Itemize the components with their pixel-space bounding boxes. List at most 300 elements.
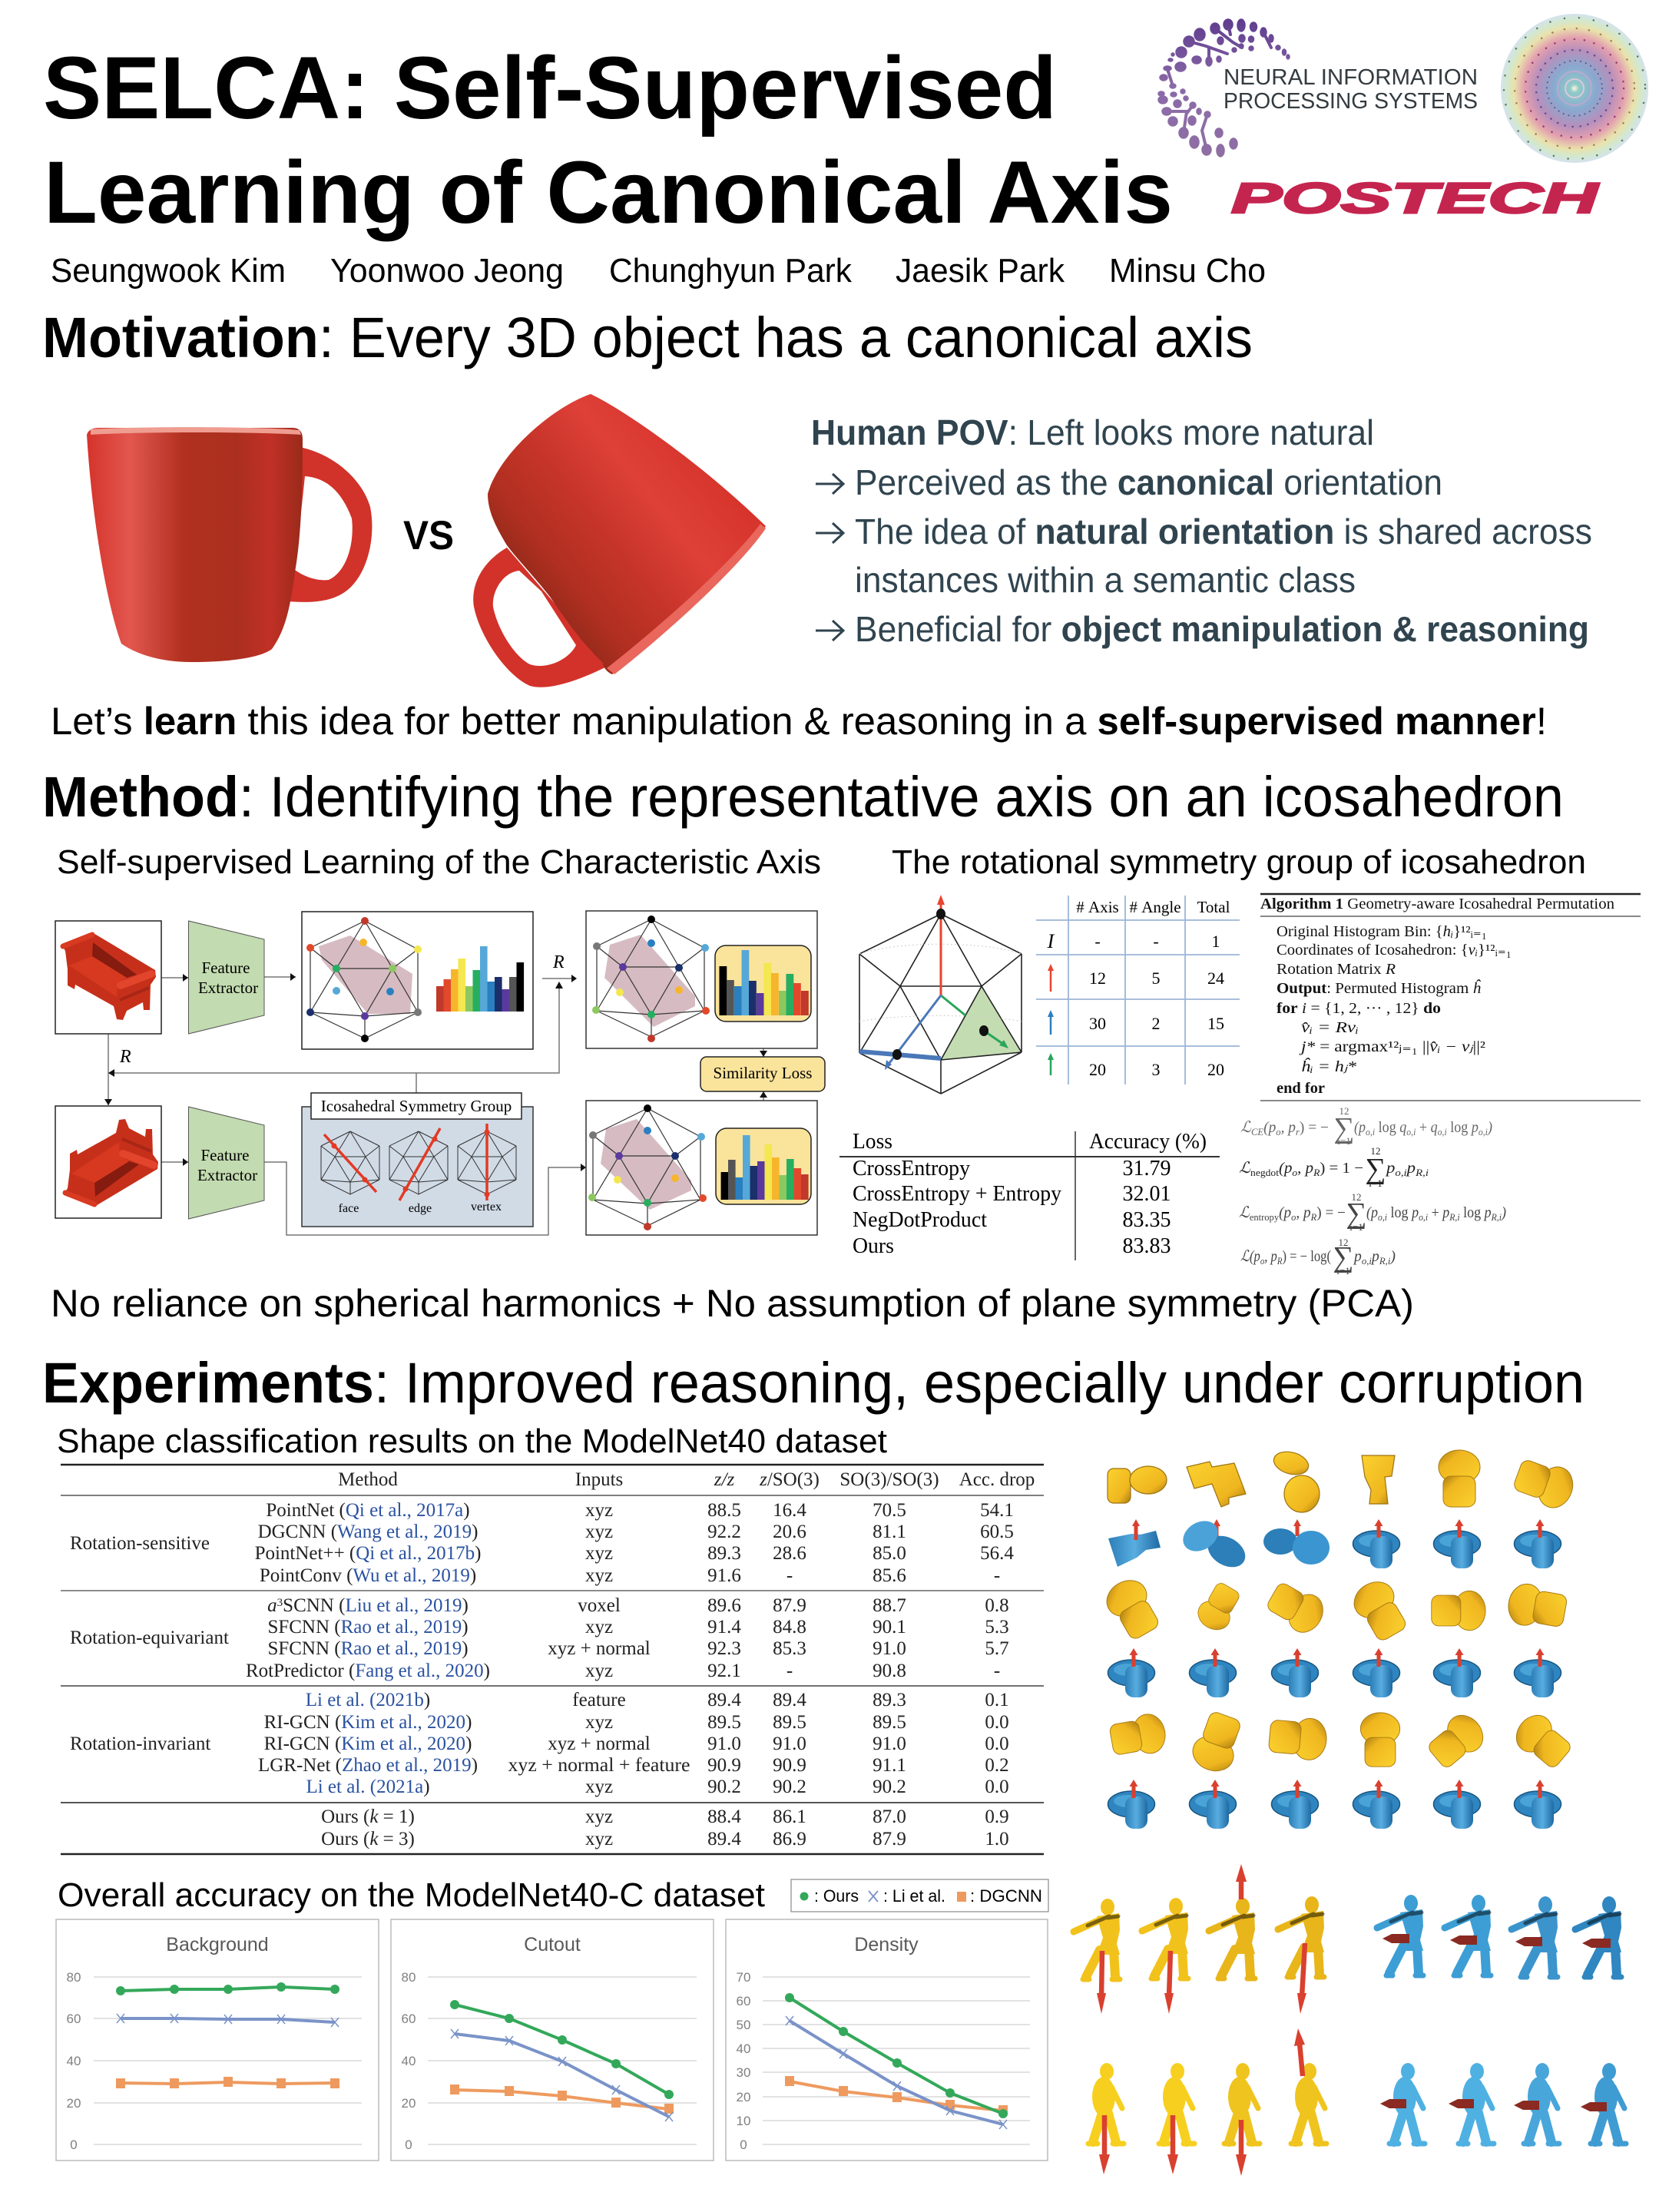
table: ModelNet40 results: 90.2 bbox=[707, 1777, 741, 1797]
loss formulas: ∑ bbox=[1333, 1241, 1354, 1273]
table: loss accuracy: NegDotProduct bbox=[853, 1208, 987, 1232]
table: ModelNet40 results: 89.3 bbox=[873, 1690, 906, 1710]
table: ModelNet40 results: 86.1 bbox=[773, 1806, 806, 1827]
image: upright red mug bbox=[87, 427, 372, 662]
loss formulas: p bbox=[1442, 1204, 1450, 1221]
table: rotation counts: 2 bbox=[1152, 1014, 1160, 1033]
loss formulas: o bbox=[1276, 1126, 1281, 1137]
table: ModelNet40 results: 91.0 bbox=[773, 1734, 806, 1754]
algorithm box: end for bbox=[1277, 1080, 1325, 1097]
table: ModelNet40 results: - bbox=[994, 1661, 1000, 1681]
loss formulas: i=1 bbox=[1349, 1221, 1363, 1233]
text block: Human POV: Perceived as the canonical orientation bbox=[855, 462, 1442, 502]
loss formulas: p bbox=[1386, 1160, 1394, 1177]
table: ModelNet40 results: 1.0 bbox=[985, 1829, 1009, 1849]
table: ModelNet40 results: 5.3 bbox=[985, 1617, 1009, 1637]
table: ModelNet40 results: 0.9 bbox=[985, 1806, 1009, 1827]
table: ModelNet40 results: Rotation-equivariant bbox=[70, 1628, 229, 1648]
table: rotation counts: 20 bbox=[1207, 1060, 1224, 1079]
table: ModelNet40 results: 28.6 bbox=[773, 1543, 806, 1564]
table: ModelNet40 results: 0.0 bbox=[985, 1712, 1009, 1733]
loss formulas: + bbox=[1416, 1119, 1431, 1136]
loss formulas: i=1 bbox=[1336, 1265, 1350, 1277]
loss formulas: R bbox=[1313, 1167, 1320, 1178]
table: rotation counts: # Angle bbox=[1129, 898, 1181, 916]
diagram: large icosahedron with rotation axes bbox=[859, 895, 1022, 1094]
similarity loss box bbox=[700, 1057, 825, 1091]
table: loss accuracy: 83.35 bbox=[1123, 1208, 1171, 1232]
heading: Experiments: Experiments: Improved reasoning, especially under corruption bbox=[42, 1351, 1584, 1415]
line chart: Density: 20 bbox=[737, 2090, 750, 2104]
loss formulas: log bbox=[1447, 1119, 1472, 1136]
chart legend bbox=[791, 1879, 1048, 1912]
table: ModelNet40 results: 91.0 bbox=[873, 1638, 906, 1659]
authors: Minsu Cho bbox=[1109, 252, 1266, 290]
table: rotation counts: I bbox=[1047, 930, 1055, 952]
algorithm box: Algorithm 1 Geometry-aware Icosahedral Permutation bbox=[1260, 896, 1614, 912]
loss formulas: ) = − bbox=[1300, 1119, 1329, 1136]
text: self-supervised statement: Let’s learn this idea for better manipulation & reasoning in a self-supervised manner! bbox=[51, 700, 1547, 743]
loss formulas: negdot bbox=[1250, 1167, 1279, 1178]
table: ModelNet40 results: Rotation-sensitive bbox=[70, 1533, 210, 1554]
table: ModelNet40 results: 0.0 bbox=[985, 1734, 1009, 1754]
table: ModelNet40 results: xyz bbox=[585, 1661, 613, 1681]
table: ModelNet40 results: 90.9 bbox=[707, 1755, 741, 1776]
table: loss accuracy: CrossEntropy bbox=[853, 1157, 970, 1181]
permuted icosahedron box top bbox=[586, 911, 817, 1048]
title: Learning of Canonical Axis bbox=[44, 144, 1173, 242]
table: ModelNet40 results: 89.5 bbox=[773, 1712, 806, 1733]
loss formulas: o bbox=[1292, 1167, 1298, 1178]
table: loss accuracy: 31.79 bbox=[1123, 1157, 1171, 1181]
table: ModelNet40 results: 0.0 bbox=[985, 1777, 1009, 1797]
loss formulas: (p bbox=[1366, 1204, 1379, 1221]
loss formulas: (p bbox=[1279, 1160, 1292, 1177]
algorithm box: j* = argmax¹²ⱼ₌₁ || v̂ᵢ − vⱼ ||² bbox=[1298, 1038, 1485, 1055]
authors: Yoonwoo Jeong bbox=[330, 252, 564, 290]
table: ModelNet40 results: Acc. drop bbox=[959, 1469, 1035, 1490]
icosahedron with histogram bbox=[302, 912, 533, 1049]
loss formulas: ) = − bbox=[1316, 1204, 1346, 1221]
diagram: pipeline bbox=[55, 911, 825, 1235]
table: ModelNet40 results: Method bbox=[338, 1469, 398, 1490]
table: ModelNet40 results: a bbox=[267, 1595, 277, 1616]
table: ModelNet40 results: xyz bbox=[585, 1806, 613, 1827]
table: ModelNet40 results: 60.5 bbox=[980, 1522, 1014, 1542]
line chart: Density: 0 bbox=[740, 2137, 747, 2152]
table: ModelNet40 results: 90.2 bbox=[773, 1777, 806, 1797]
table: ModelNet40 results: 70.5 bbox=[873, 1500, 906, 1521]
permuted icosahedron box bottom bbox=[586, 1101, 817, 1235]
panel: icosahedral symmetry group bbox=[302, 1093, 533, 1227]
feature extractor top bbox=[189, 921, 264, 1034]
table: ModelNet40 results: 89.5 bbox=[707, 1712, 741, 1733]
loss formulas: ) bbox=[1501, 1204, 1506, 1221]
text block: Human POV: Beneficial for object manipulation & reasoning bbox=[855, 609, 1589, 649]
line chart: Cutout: 40 bbox=[402, 2054, 416, 2068]
table: ModelNet40 results: PointConv (Wu et al., 2019) bbox=[260, 1565, 476, 1586]
text: no reliance statement: No reliance on spherical harmonics + No assumption of plane symmetry (PCA) bbox=[51, 1282, 1414, 1325]
chart legend: : Ours bbox=[814, 1886, 859, 1906]
loss formulas: log bbox=[1375, 1119, 1399, 1136]
loss formulas: , p bbox=[1296, 1204, 1311, 1221]
table: ModelNet40 results: RotPredictor (Fang et al., 2020) bbox=[246, 1661, 490, 1681]
table: loss accuracy: 83.83 bbox=[1123, 1234, 1171, 1258]
logo: NeurIPS: NEURAL INFORMATION bbox=[1224, 65, 1478, 90]
loss formulas: R,i bbox=[1415, 1167, 1429, 1178]
table: ModelNet40 results: 90.8 bbox=[873, 1661, 906, 1681]
line chart: Cutout: 60 bbox=[402, 2012, 416, 2026]
rotation label top: R bbox=[552, 952, 565, 972]
line chart: Density: 60 bbox=[737, 1994, 750, 2008]
line chart: Density: 70 bbox=[737, 1970, 750, 1985]
table: rotation counts: - bbox=[1153, 932, 1159, 951]
table: ModelNet40 results: 87.9 bbox=[873, 1829, 906, 1849]
loss formulas: p bbox=[1485, 1204, 1492, 1221]
heading: Method: Method: Identifying the representative axis on an icosahedron bbox=[42, 765, 1564, 829]
table: ModelNet40 results: 88.4 bbox=[707, 1806, 741, 1827]
feature extractor bottom bbox=[189, 1107, 264, 1219]
loss formulas: o,i bbox=[1378, 1211, 1387, 1223]
table: ModelNet40 results: Ours (k = 1) bbox=[321, 1806, 415, 1827]
loss formulas: entropy bbox=[1250, 1211, 1280, 1223]
table: ModelNet40 results: 91.0 bbox=[873, 1734, 906, 1754]
table: ModelNet40 results: 89.4 bbox=[707, 1829, 741, 1849]
loss formulas: ) = − log( bbox=[1282, 1248, 1331, 1265]
authors: Jaesik Park bbox=[896, 252, 1065, 290]
table: loss accuracy: Loss bbox=[853, 1130, 892, 1154]
loss formulas: ℒ(p bbox=[1240, 1248, 1264, 1265]
table: ModelNet40 results: Li et al. (2021b) bbox=[306, 1690, 430, 1710]
table: rotation counts bbox=[1036, 896, 1240, 1084]
text block: Human POV: instances within a semantic class bbox=[855, 560, 1356, 600]
line chart: Cutout: 0 bbox=[405, 2137, 412, 2152]
feature extractor bottom: Feature bbox=[201, 1146, 249, 1164]
loss formulas: , p bbox=[1297, 1160, 1313, 1177]
table: rotation counts: 30 bbox=[1089, 1014, 1106, 1033]
table: ModelNet40 results: 0.2 bbox=[985, 1755, 1009, 1776]
table: ModelNet40 results: Ours (k = 3) bbox=[321, 1829, 415, 1849]
table: ModelNet40 results: 0.1 bbox=[985, 1690, 1009, 1710]
feature extractor bottom: Extractor bbox=[197, 1166, 257, 1184]
table: ModelNet40 results: 85.0 bbox=[873, 1543, 906, 1564]
loss formulas: q bbox=[1399, 1119, 1407, 1136]
title: SELCA: Self-Supervised bbox=[43, 39, 1057, 137]
table: ModelNet40 results: 89.5 bbox=[873, 1712, 906, 1733]
table: ModelNet40 results: 5.7 bbox=[985, 1638, 1009, 1659]
loss formulas: o,i bbox=[1479, 1126, 1488, 1137]
loss formulas: , p bbox=[1281, 1119, 1296, 1136]
loss formulas: p bbox=[1405, 1160, 1416, 1177]
table: ModelNet40 results: 84.8 bbox=[773, 1617, 806, 1637]
loss formulas: p bbox=[1472, 1119, 1479, 1136]
table: loss accuracy: 32.01 bbox=[1123, 1182, 1171, 1206]
table: ModelNet40 results: 85.3 bbox=[773, 1638, 806, 1659]
panel: icosahedral symmetry group: Icosahedral Symmetry Group bbox=[321, 1097, 512, 1115]
loss formulas: o,i bbox=[1438, 1126, 1447, 1137]
logo: POSTECH: POSTECH bbox=[1231, 174, 1600, 222]
table: ModelNet40 results: 92.1 bbox=[707, 1661, 741, 1681]
table: rotation counts: Total bbox=[1197, 898, 1230, 916]
table: loss accuracy: Ours bbox=[853, 1234, 894, 1258]
loss formulas: q bbox=[1431, 1119, 1439, 1136]
chart legend: : DGCNN bbox=[970, 1886, 1042, 1906]
loss formulas: 12 bbox=[1370, 1145, 1381, 1157]
table: ModelNet40 results: xyz bbox=[585, 1777, 613, 1797]
panel: icosahedral symmetry group: edge bbox=[409, 1202, 432, 1215]
table: ModelNet40 results bbox=[61, 1465, 1044, 1854]
table: ModelNet40 results: xyz bbox=[585, 1712, 613, 1733]
subheading: symmetry group: The rotational symmetry group of icosahedron bbox=[892, 843, 1586, 881]
subheading: shape classification: Shape classification results on the ModelNet40 dataset bbox=[57, 1422, 887, 1460]
table: ModelNet40 results: xyz bbox=[585, 1522, 613, 1542]
table: ModelNet40 results: 91.6 bbox=[707, 1565, 741, 1586]
table: ModelNet40 results: 89.4 bbox=[707, 1690, 741, 1710]
loss formulas: o,i bbox=[1362, 1255, 1372, 1267]
table: ModelNet40 results: Li et al. (2021a) bbox=[306, 1777, 430, 1797]
table: ModelNet40 results: xyz + normal bbox=[548, 1734, 651, 1754]
loss formulas: o,i bbox=[1406, 1126, 1416, 1137]
table: loss accuracy bbox=[839, 1130, 1220, 1260]
feature extractor top: Extractor bbox=[198, 979, 258, 997]
rotation label left: R bbox=[119, 1047, 131, 1067]
table: ModelNet40 results: z/z bbox=[714, 1469, 734, 1490]
table: ModelNet40 results: 3 bbox=[277, 1597, 283, 1609]
loss formulas: 12 bbox=[1338, 1237, 1349, 1248]
line chart: Background: 40 bbox=[67, 2054, 81, 2068]
table: ModelNet40 results: 90.1 bbox=[873, 1617, 906, 1637]
loss formulas: o bbox=[1260, 1255, 1265, 1267]
loss formulas: 12 bbox=[1339, 1105, 1349, 1117]
table: ModelNet40 results: 87.0 bbox=[873, 1806, 906, 1827]
table: ModelNet40 results: 86.9 bbox=[773, 1829, 806, 1849]
table: rotation counts: 3 bbox=[1152, 1060, 1160, 1079]
loss formulas: R bbox=[1310, 1211, 1316, 1223]
input object box top bbox=[55, 921, 161, 1034]
loss formulas: o bbox=[1291, 1211, 1296, 1223]
text block: Human POV bbox=[811, 412, 1592, 649]
panel: icosahedral symmetry group: face bbox=[339, 1202, 359, 1215]
table: ModelNet40 results: 87.9 bbox=[773, 1595, 806, 1616]
line chart: Background: 60 bbox=[67, 2012, 81, 2026]
subheading: learning diagram: Self-supervised Learning of the Characteristic Axis bbox=[57, 843, 821, 881]
table: rotation counts: 12 bbox=[1089, 969, 1106, 988]
label: VS: VS bbox=[403, 513, 454, 558]
table: ModelNet40 results: voxel bbox=[578, 1595, 621, 1616]
loss formulas: r bbox=[1296, 1126, 1300, 1137]
table: rotation counts: - bbox=[1094, 932, 1101, 951]
table: ModelNet40 results: xyz bbox=[585, 1543, 613, 1564]
table: ModelNet40 results: 91.4 bbox=[707, 1617, 741, 1637]
table: loss accuracy: Accuracy (%) bbox=[1089, 1130, 1207, 1154]
loss formulas: p bbox=[1412, 1204, 1419, 1221]
panel: icosahedral symmetry group: vertex bbox=[471, 1200, 502, 1214]
table: ModelNet40 results: SFCNN (Rao et al., 2019) bbox=[267, 1638, 469, 1659]
table: ModelNet40 results: xyz bbox=[585, 1500, 613, 1521]
algorithm box: Coordinates of Icosahedron: { vᵢ}¹²ᵢ₌₁ bbox=[1277, 942, 1512, 959]
table: ModelNet40 results: 16.4 bbox=[773, 1500, 806, 1521]
loss formulas: o,i bbox=[1395, 1167, 1407, 1178]
image grid: blue human point clouds with axis arrows bbox=[1377, 1895, 1626, 2144]
table: ModelNet40 results: DGCNN (Wang et al., 2019) bbox=[258, 1522, 478, 1542]
table: ModelNet40 results: PointNet++ (Qi et al., 2017b) bbox=[255, 1543, 481, 1564]
table: ModelNet40 results: 89.6 bbox=[707, 1595, 741, 1616]
table: rotation counts: 15 bbox=[1207, 1014, 1224, 1033]
loss formulas: ) bbox=[1487, 1119, 1492, 1136]
loss formulas: ℒ bbox=[1239, 1160, 1250, 1177]
text block: Human POV: The idea of natural orientation is shared across bbox=[855, 512, 1592, 551]
table: ModelNet40 results: 89.4 bbox=[773, 1690, 806, 1710]
loss formulas: (p bbox=[1263, 1119, 1276, 1136]
loss formulas: R,i bbox=[1491, 1211, 1502, 1223]
table: ModelNet40 results: xyz + normal bbox=[548, 1638, 651, 1659]
logo: mandala circle bbox=[1501, 14, 1648, 163]
table: rotation counts: 5 bbox=[1152, 969, 1160, 988]
algorithm box: Output: Permuted Histogram ĥ bbox=[1277, 979, 1482, 997]
table: ModelNet40 results: xyz + normal + feature bbox=[508, 1755, 690, 1776]
table: ModelNet40 results: 91.0 bbox=[707, 1734, 741, 1754]
table: ModelNet40 results: RI-GCN (Kim et al., 2020) bbox=[264, 1712, 472, 1733]
line chart: Background: 20 bbox=[67, 2096, 81, 2111]
loss formulas: (p bbox=[1354, 1119, 1367, 1136]
table: ModelNet40 results: z/SO(3) bbox=[759, 1469, 820, 1490]
loss formulas: R,i bbox=[1449, 1211, 1460, 1223]
table: ModelNet40 results: - bbox=[786, 1661, 793, 1681]
authors: Seungwook Kim bbox=[51, 252, 286, 290]
table: ModelNet40 results: 81.1 bbox=[873, 1522, 906, 1542]
loss formulas: o,i bbox=[1419, 1211, 1428, 1223]
loss formulas: i=1 bbox=[1369, 1177, 1382, 1189]
line chart: Density bbox=[726, 1919, 1048, 2161]
table: ModelNet40 results: - bbox=[994, 1565, 1000, 1586]
table: ModelNet40 results: feature bbox=[572, 1690, 626, 1710]
table: rotation counts: 1 bbox=[1212, 932, 1220, 951]
image grid: mug point clouds bbox=[1101, 1449, 1578, 1829]
rotated object box bbox=[55, 1106, 161, 1218]
table: ModelNet40 results: RI-GCN (Kim et al., 2020) bbox=[264, 1734, 472, 1754]
line chart: Density: 30 bbox=[737, 2065, 750, 2080]
loss formulas: ∑ bbox=[1346, 1197, 1367, 1230]
table: ModelNet40 results: - bbox=[786, 1565, 793, 1586]
line chart: Cutout: 20 bbox=[402, 2096, 416, 2111]
heading: Motivation: Motivation: Every 3D object has a canonical axis bbox=[42, 306, 1253, 369]
loss formulas: ℒ bbox=[1240, 1119, 1251, 1136]
table: ModelNet40 results: xyz bbox=[585, 1565, 613, 1586]
title bbox=[43, 39, 1173, 242]
loss formulas: log bbox=[1460, 1204, 1485, 1221]
table: ModelNet40 results: SCNN ( bbox=[283, 1595, 345, 1616]
loss formulas: R,i bbox=[1379, 1255, 1391, 1267]
table: ModelNet40 results: SFCNN (Rao et al., 2019) bbox=[267, 1617, 469, 1637]
chart legend: : Li et al. bbox=[883, 1886, 945, 1906]
line chart: Density: 10 bbox=[737, 2114, 750, 2128]
similarity loss box: Similarity Loss bbox=[714, 1064, 812, 1082]
connector arrows bbox=[104, 973, 767, 1235]
table: ModelNet40 results: 56.4 bbox=[980, 1543, 1014, 1564]
table: ModelNet40 results: SO(3)/SO(3) bbox=[839, 1469, 939, 1490]
algorithm box: Rotation Matrix R bbox=[1277, 961, 1396, 978]
authors bbox=[51, 252, 1266, 290]
line chart: Background bbox=[56, 1919, 379, 2161]
loss formulas: i=1 bbox=[1337, 1135, 1351, 1147]
table: ModelNet40 results: 91.1 bbox=[873, 1755, 906, 1776]
authors: Chunghyun Park bbox=[609, 252, 853, 290]
logo: NeurIPS bbox=[1158, 19, 1478, 157]
table: ModelNet40 results: xyz bbox=[585, 1617, 613, 1637]
table: ModelNet40 results: Liu et al., 2019) bbox=[345, 1595, 469, 1616]
table: ModelNet40 results: 90.2 bbox=[873, 1777, 906, 1797]
loss formulas: R bbox=[1277, 1255, 1283, 1267]
line chart: Density: 40 bbox=[737, 2041, 750, 2056]
loss formulas: CE bbox=[1251, 1126, 1263, 1137]
loss formulas: p bbox=[1370, 1248, 1379, 1265]
line chart: Background: 0 bbox=[70, 2137, 78, 2152]
table: ModelNet40 results: Rotation-invariant bbox=[70, 1734, 210, 1754]
text block: Human POV: Human POV: Left looks more natural bbox=[811, 412, 1374, 452]
table: ModelNet40 results: 92.2 bbox=[707, 1522, 741, 1542]
table: ModelNet40 results: 89.3 bbox=[707, 1543, 741, 1564]
loss formulas bbox=[1239, 1105, 1506, 1277]
table: ModelNet40 results: xyz bbox=[585, 1829, 613, 1849]
table: ModelNet40 results: 90.9 bbox=[773, 1755, 806, 1776]
logo: NeurIPS: PROCESSING SYSTEMS bbox=[1224, 89, 1478, 114]
algorithm box: ĥᵢ = hⱼ* bbox=[1301, 1057, 1356, 1075]
loss formulas: p bbox=[1354, 1248, 1362, 1265]
subheading: overall accuracy: Overall accuracy on the ModelNet40-C dataset bbox=[58, 1876, 765, 1914]
table: rotation counts: 24 bbox=[1207, 969, 1224, 988]
line chart: Background: Background bbox=[166, 1934, 269, 1955]
algorithm box bbox=[1260, 894, 1641, 1101]
loss formulas: ∑ bbox=[1333, 1112, 1355, 1144]
algorithm box: for i = {1, 2, ··· , 12} do bbox=[1277, 1000, 1441, 1017]
feature extractor top: Feature bbox=[202, 959, 250, 977]
table: ModelNet40 results: 88.7 bbox=[873, 1595, 906, 1616]
table: loss accuracy: CrossEntropy + Entropy bbox=[853, 1182, 1061, 1206]
table: ModelNet40 results: 0.8 bbox=[985, 1595, 1009, 1616]
loss formulas: , p bbox=[1264, 1248, 1277, 1265]
line chart: Cutout: Cutout bbox=[524, 1934, 581, 1955]
algorithm box: Original Histogram Bin: { hᵢ}¹²ᵢ₌₁ bbox=[1277, 923, 1487, 940]
table: ModelNet40 results: 20.6 bbox=[773, 1522, 806, 1542]
table: rotation counts: # Axis bbox=[1076, 898, 1119, 916]
algorithm box: v̂ᵢ = Rvᵢ bbox=[1301, 1019, 1359, 1036]
loss formulas: o,i bbox=[1366, 1126, 1375, 1137]
table: ModelNet40 results: 85.6 bbox=[873, 1565, 906, 1586]
line chart: Cutout bbox=[391, 1919, 714, 2161]
image grid: yellow human point clouds with axis arrows bbox=[1074, 1864, 1326, 2176]
line chart: Cutout: 80 bbox=[402, 1970, 416, 1985]
loss formulas: 12 bbox=[1352, 1191, 1361, 1203]
line chart: Background: 80 bbox=[67, 1970, 81, 1985]
line chart: Density: 50 bbox=[737, 2018, 750, 2032]
loss formulas: log bbox=[1387, 1204, 1412, 1221]
image: rotated red mug bbox=[473, 394, 766, 687]
table: ModelNet40 results: 92.3 bbox=[707, 1638, 741, 1659]
table: ModelNet40 results: 88.5 bbox=[707, 1500, 741, 1521]
line chart: Density: Density bbox=[854, 1934, 919, 1955]
table: ModelNet40 results: LGR-Net (Zhao et al., 2019) bbox=[258, 1755, 478, 1776]
table: ModelNet40 results: Inputs bbox=[575, 1469, 623, 1490]
loss formulas: ) bbox=[1389, 1248, 1396, 1265]
loss formulas: + bbox=[1428, 1204, 1442, 1221]
table: rotation counts: 20 bbox=[1089, 1060, 1106, 1079]
loss formulas: (p bbox=[1279, 1204, 1291, 1221]
loss formulas: ) = 1 − bbox=[1320, 1160, 1363, 1177]
table: ModelNet40 results: PointNet (Qi et al., 2017a) bbox=[266, 1500, 470, 1521]
loss formulas: ∑ bbox=[1365, 1153, 1386, 1185]
table: ModelNet40 results: 54.1 bbox=[980, 1500, 1014, 1521]
loss formulas: ℒ bbox=[1239, 1204, 1250, 1221]
